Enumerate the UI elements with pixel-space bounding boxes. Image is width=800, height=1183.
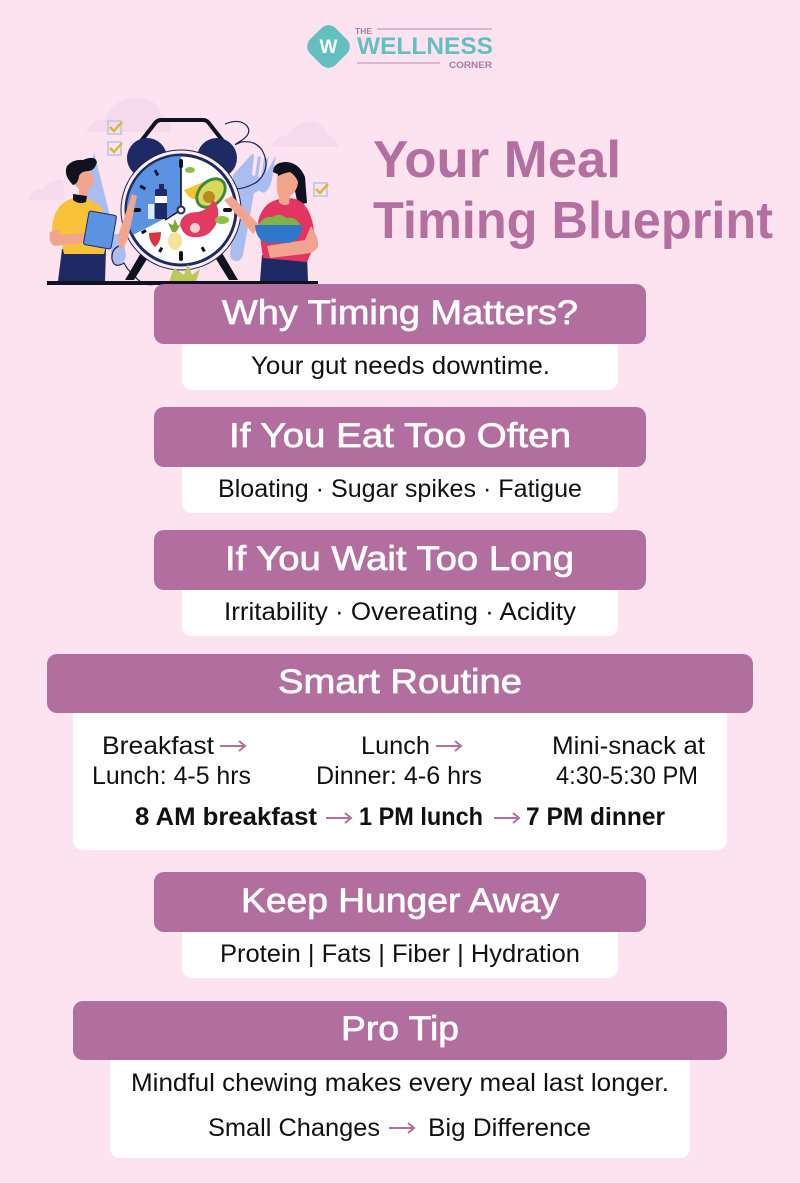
icon: woman with salad bowl (224, 162, 318, 281)
mini-snack time: 4:30-5:30 PM (556, 762, 698, 790)
logo: The Wellness Corner: CORNER (449, 60, 493, 70)
breakfast to lunch interval (92, 732, 251, 790)
icon: checkboxes (108, 121, 328, 196)
panel: why timing matters: Your gut needs downtime. (251, 352, 550, 380)
icon: lemon (184, 180, 209, 199)
panel: keep hunger away (154, 872, 646, 978)
icon: squiggles (225, 121, 266, 189)
icon: steak (180, 200, 218, 237)
icon: knife and fork (84, 152, 276, 264)
panel: pro tip: Pro Tip (341, 1010, 459, 1048)
panel: pro tip (73, 1001, 727, 1158)
panel: if you wait too long: Irritability · Overeating · Acidity (224, 598, 577, 626)
mini-snack time (552, 732, 705, 790)
panel: why timing matters: Why Timing Matters? (222, 294, 578, 332)
lunch to dinner interval: Lunch (361, 732, 430, 760)
breakfast to lunch interval: Lunch: 4-5 hrs (92, 762, 251, 790)
panel: if you eat too often (154, 407, 646, 513)
title: Your Meal (373, 131, 621, 189)
panel: if you eat too often: If You Eat Too Often (229, 417, 571, 455)
title (373, 131, 773, 250)
sample schedule: 1 PM lunch (359, 803, 483, 831)
icon: teal W badge: W (320, 37, 338, 58)
panel: keep hunger away: Protein | Fats | Fiber | Hydration (220, 940, 580, 968)
icon: man with tablet (50, 158, 137, 281)
lunch to dinner interval (316, 732, 482, 790)
ground line (47, 281, 318, 285)
icon: teal W badge (303, 21, 354, 72)
lunch to dinner interval: Dinner: 4-6 hrs (316, 762, 482, 790)
illustration: people around a meal clock (28, 98, 338, 285)
panel: if you wait too long (154, 530, 646, 636)
panel: if you eat too often: Bloating · Sugar spikes · Fatigue (218, 475, 582, 503)
logo: The Wellness Corner: WELLNESS (357, 33, 493, 60)
panel: pro tip: Small Changes (208, 1114, 380, 1142)
panel: keep hunger away: Keep Hunger Away (241, 882, 559, 920)
icon: water bottle (148, 184, 167, 219)
panel: why timing matters (154, 284, 646, 390)
breakfast to lunch interval: Breakfast (102, 732, 214, 760)
panel: smart routine (47, 654, 753, 850)
panel: smart routine: Smart Routine (278, 663, 522, 701)
panel: if you wait too long: If You Wait Too Long (225, 540, 574, 578)
icon: alarm clock (121, 120, 241, 282)
icon: avocado (189, 171, 233, 215)
title: Timing Blueprint (373, 192, 773, 250)
logo: The Wellness Corner: THE (355, 27, 373, 36)
icon: strawberry and radish (149, 232, 161, 247)
clouds (28, 98, 338, 200)
sample schedule: 8 AM breakfast (135, 803, 318, 831)
panel: pro tip: Big Difference (428, 1114, 591, 1142)
logo: The Wellness Corner (303, 21, 493, 72)
sample schedule: 7 PM dinner (526, 803, 665, 831)
mini-snack time: Mini-snack at (552, 732, 705, 760)
sample schedule (135, 803, 665, 831)
panel: pro tip: Mindful chewing makes every meal last longer. (131, 1069, 669, 1097)
